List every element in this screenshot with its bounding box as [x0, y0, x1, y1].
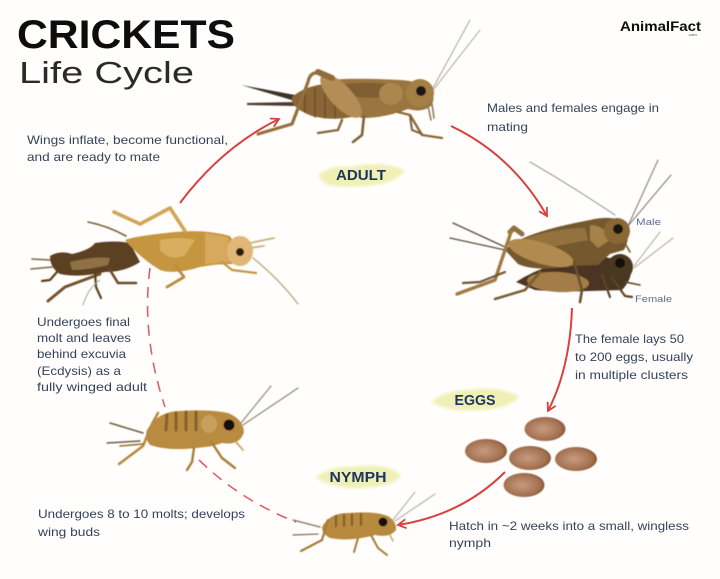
icon: molting cricket: [31, 208, 298, 305]
arrow: adult to mating: [451, 126, 547, 216]
title: CRICKETS: [17, 13, 235, 57]
text: hatch: nymph: [449, 536, 491, 550]
logo: AnimalFact: AnimalFact: [620, 18, 701, 34]
text: female lays eggs: in multiple clusters: [575, 368, 688, 382]
text: final molt: (Ecdysis) as a: [37, 364, 121, 378]
text: molts: Undergoes 8 to 10 molts; develops: [38, 507, 245, 521]
text: female lays eggs: [575, 332, 693, 382]
text: female lays eggs: The female lays 50: [575, 332, 684, 346]
arrow: nymph to winged adult: [180, 119, 279, 203]
label: Male: Male: [636, 217, 661, 228]
label: NYMPH: NYMPH: [330, 470, 386, 486]
text: hatch: Hatch in ~2 weeks into a small, wingless: [449, 519, 689, 533]
text: final molt: behind excuvia: [37, 347, 126, 361]
text: wings inflate: and are ready to mate: [27, 150, 160, 164]
label: ADULT: ADULT: [336, 168, 386, 184]
text: female lays eggs: to 200 eggs, usually: [575, 350, 693, 364]
icon: small nymph cricket: [293, 492, 435, 555]
title: Life Cycle: [19, 55, 194, 90]
text: mating: mating: [487, 120, 528, 134]
text: molts: [37, 507, 245, 539]
icon: mating crickets: [450, 160, 673, 302]
label: EGGS: [431, 388, 519, 411]
arrow: dashed molt lower: [199, 460, 296, 522]
label: Female: Female: [635, 294, 672, 305]
label: NYMPH: [316, 466, 401, 488]
text: hatch: [449, 519, 689, 550]
arrow: dashed molt upper: [148, 268, 165, 407]
text: final molt: molt and leaves: [37, 331, 131, 345]
logo: AnimalFact: .com: [688, 32, 697, 37]
arrow: eggs to nymph: [398, 472, 505, 525]
icon: adult cricket: [241, 20, 480, 142]
text: wings inflate: [27, 133, 228, 164]
icon: eggs: [465, 417, 597, 497]
icon: nymph cricket: [107, 386, 298, 470]
label: EGGS: EGGS: [454, 393, 496, 409]
text: wings inflate: Wings inflate, become functional,: [27, 133, 228, 147]
text: final molt: fully winged adult: [37, 380, 148, 394]
text: mating: [487, 101, 659, 134]
text: final molt: [37, 315, 148, 394]
arrow: mating to eggs: [548, 308, 572, 411]
title: [17, 13, 235, 90]
text: final molt: Undergoes final: [37, 315, 130, 329]
label: ADULT: [318, 164, 405, 187]
text: molts: wing buds: [37, 525, 100, 539]
text: mating: Males and females engage in: [487, 101, 659, 115]
